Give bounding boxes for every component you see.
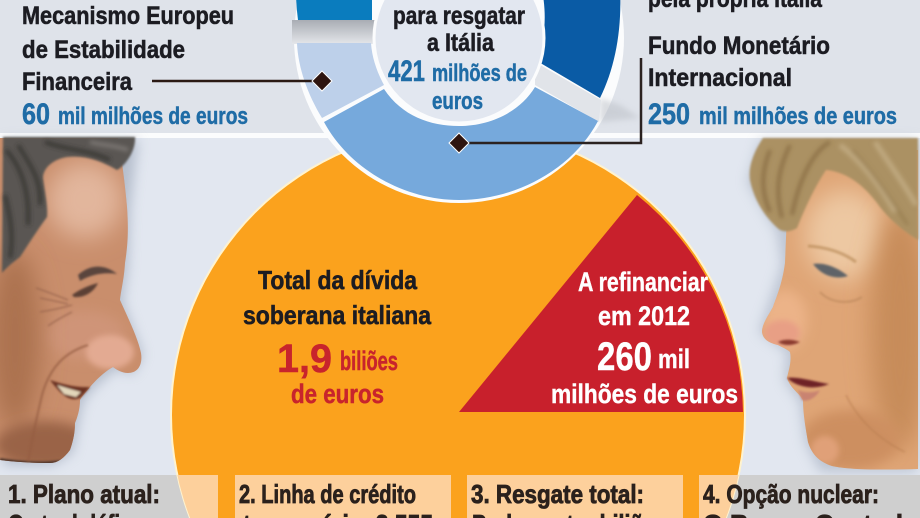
segment: European mechanism [297,43,384,118]
scenario 3: 3. Resgate total: [471,479,644,509]
label: Fundo Monetário Internacional: 250 [648,98,690,131]
label: Mecanismo Europeu: Financeira [22,68,133,96]
label: total sovereign debt: de euros [291,379,384,409]
label: to refinance in 2012: mil [658,344,690,374]
label: Mecanismo Europeu [22,2,248,131]
photo: Sarkozy profile [0,137,150,470]
label: total sovereign debt: Total da dívida [258,265,417,295]
scenario 4: 4. Opção nuclear: [703,479,879,509]
callout line: left [152,71,332,91]
header band [0,0,920,138]
label: total sovereign debt: soberana italiana [243,300,431,330]
segment: dark blue right [537,0,620,98]
scenario 2 [239,479,433,518]
label: to refinance in 2012: A refinanciar [578,267,708,297]
label: Fundo Monetário Internacional: Internacional [648,64,792,92]
scenario 1 [8,479,160,518]
label: total sovereign debt: 1,9 [277,337,332,381]
donut centre label [388,2,527,115]
scenario 1: 1. Plano atual: [8,479,160,509]
donut centre [374,0,544,123]
label: to refinance in 2012: 260 [597,335,652,379]
bottom boxes on circle [178,475,738,518]
donut centre label: euros [432,88,483,115]
label: total sovereign debt [243,265,431,409]
label: to refinance in 2012: milhões de euros [551,379,738,409]
label: Mecanismo Europeu: mil milhões de euros [58,103,248,130]
label: Mecanismo Europeu: de Estabilidade [22,36,185,64]
label: Fundo Monetário Internacional [648,32,897,131]
label: Mecanismo Europeu: 60 [22,98,50,131]
segment: IMF [324,87,598,200]
donut centre label: 421 [388,55,425,88]
segment: Italy itself [296,0,372,20]
label: Mecanismo Europeu: Mecanismo Europeu [22,2,234,30]
donut centre label: milhões de [432,60,527,87]
donut centre label: para resgatar [393,2,525,30]
bottom boxes on background [0,475,920,518]
red wedge: to refinance in 2012 [459,195,743,412]
donut chart: funds to rescue Italy [292,0,640,203]
label: total sovereign debt: biliões [340,346,398,376]
big circle: total sovereign debt [170,127,746,518]
callout line: right [449,58,641,153]
label: to refinance in 2012: em 2012 [598,301,690,331]
label: Fundo Monetário Internacional: Fundo Monetário [648,32,830,60]
photo: Merkel profile [747,138,920,475]
scenario 2: 2. Linha de crédito [239,479,416,509]
donut centre label: a Itália [427,29,495,57]
label: to refinance in 2012 [551,267,738,409]
